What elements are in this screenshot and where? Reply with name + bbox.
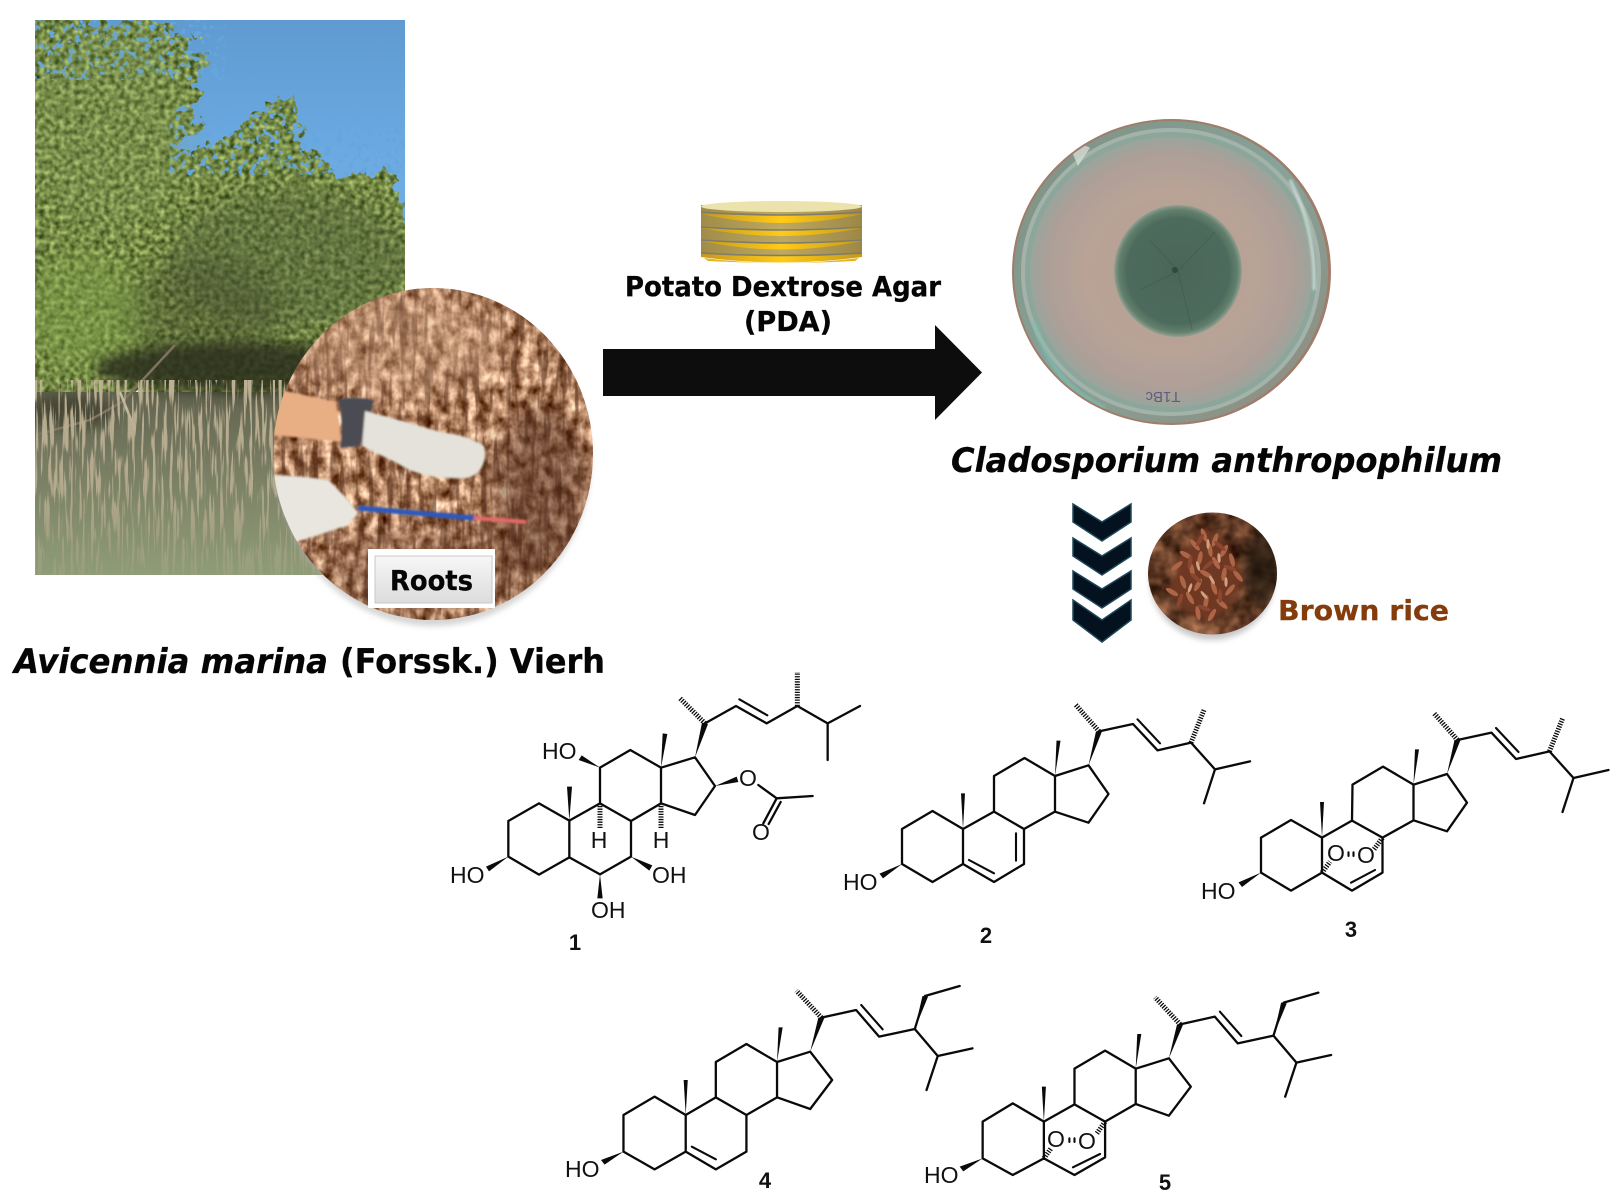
icon: downward chevrons bbox=[1073, 504, 1131, 642]
chemical structure 5: HO bbox=[924, 1162, 958, 1188]
chemical structure 3: O bbox=[1327, 840, 1345, 866]
chemical structure 1: HO bbox=[542, 738, 576, 764]
chemical structure 5: O bbox=[1047, 1126, 1065, 1152]
chemical structure 1: H bbox=[653, 827, 669, 853]
chemical structure 3: O bbox=[1357, 842, 1375, 868]
photo: petri dish culture: T1Bc bbox=[1145, 388, 1181, 405]
arrow: plant to culture bbox=[603, 325, 982, 420]
text: Potato Dextrose Agar label: Potato Dextrose Agar bbox=[625, 270, 941, 303]
chemical structure 1: OH bbox=[591, 897, 626, 923]
text: Potato Dextrose Agar label bbox=[625, 270, 941, 338]
chemical structure 2: 2 bbox=[980, 923, 992, 948]
chemical structure 4: HO bbox=[565, 1156, 600, 1182]
heading: plant species name: Avicennia marina bbox=[11, 642, 328, 682]
heading: plant species name bbox=[11, 642, 605, 682]
chemical structure 1 bbox=[450, 672, 860, 955]
photo: roots inset circle bbox=[270, 285, 600, 626]
chemical structure 1: 1 bbox=[569, 930, 581, 955]
chemical structure 5 bbox=[924, 993, 1331, 1195]
label: roots button: Roots bbox=[390, 564, 473, 597]
photo: mangrove trees in water bbox=[25, 10, 410, 575]
chemical structure 4 bbox=[565, 986, 972, 1193]
chemical structure 5: O bbox=[1078, 1128, 1096, 1154]
heading: plant species name: (Forssk.) Vierh bbox=[340, 642, 605, 682]
chemical structure 5: 5 bbox=[1159, 1170, 1171, 1195]
label: roots button bbox=[368, 549, 495, 608]
chemical structure 2 bbox=[843, 704, 1250, 948]
chemical structure 1: O bbox=[739, 765, 757, 791]
icon: stack of PDA plates bbox=[701, 201, 862, 263]
chemical structure 1: H bbox=[591, 827, 607, 853]
chemical structure 4: 4 bbox=[759, 1168, 772, 1193]
heading: fungus species name: Cladosporium anthropophilum bbox=[951, 441, 1502, 481]
chemical structure 3: 3 bbox=[1345, 917, 1357, 942]
chemical structure 3 bbox=[1201, 713, 1608, 942]
chemical structure 2: HO bbox=[843, 869, 878, 895]
photo: petri dish culture bbox=[1012, 119, 1331, 425]
text: Potato Dextrose Agar label: (PDA) bbox=[744, 305, 832, 338]
text: brown rice label: Brown rice bbox=[1278, 594, 1449, 627]
chemical structure 1: OH bbox=[652, 862, 686, 888]
chemical structure 3: HO bbox=[1201, 878, 1236, 904]
photo: brown rice bowl bbox=[1148, 512, 1282, 640]
chemical structure 1: O bbox=[752, 819, 770, 845]
chemical structure 1: HO bbox=[450, 862, 484, 888]
